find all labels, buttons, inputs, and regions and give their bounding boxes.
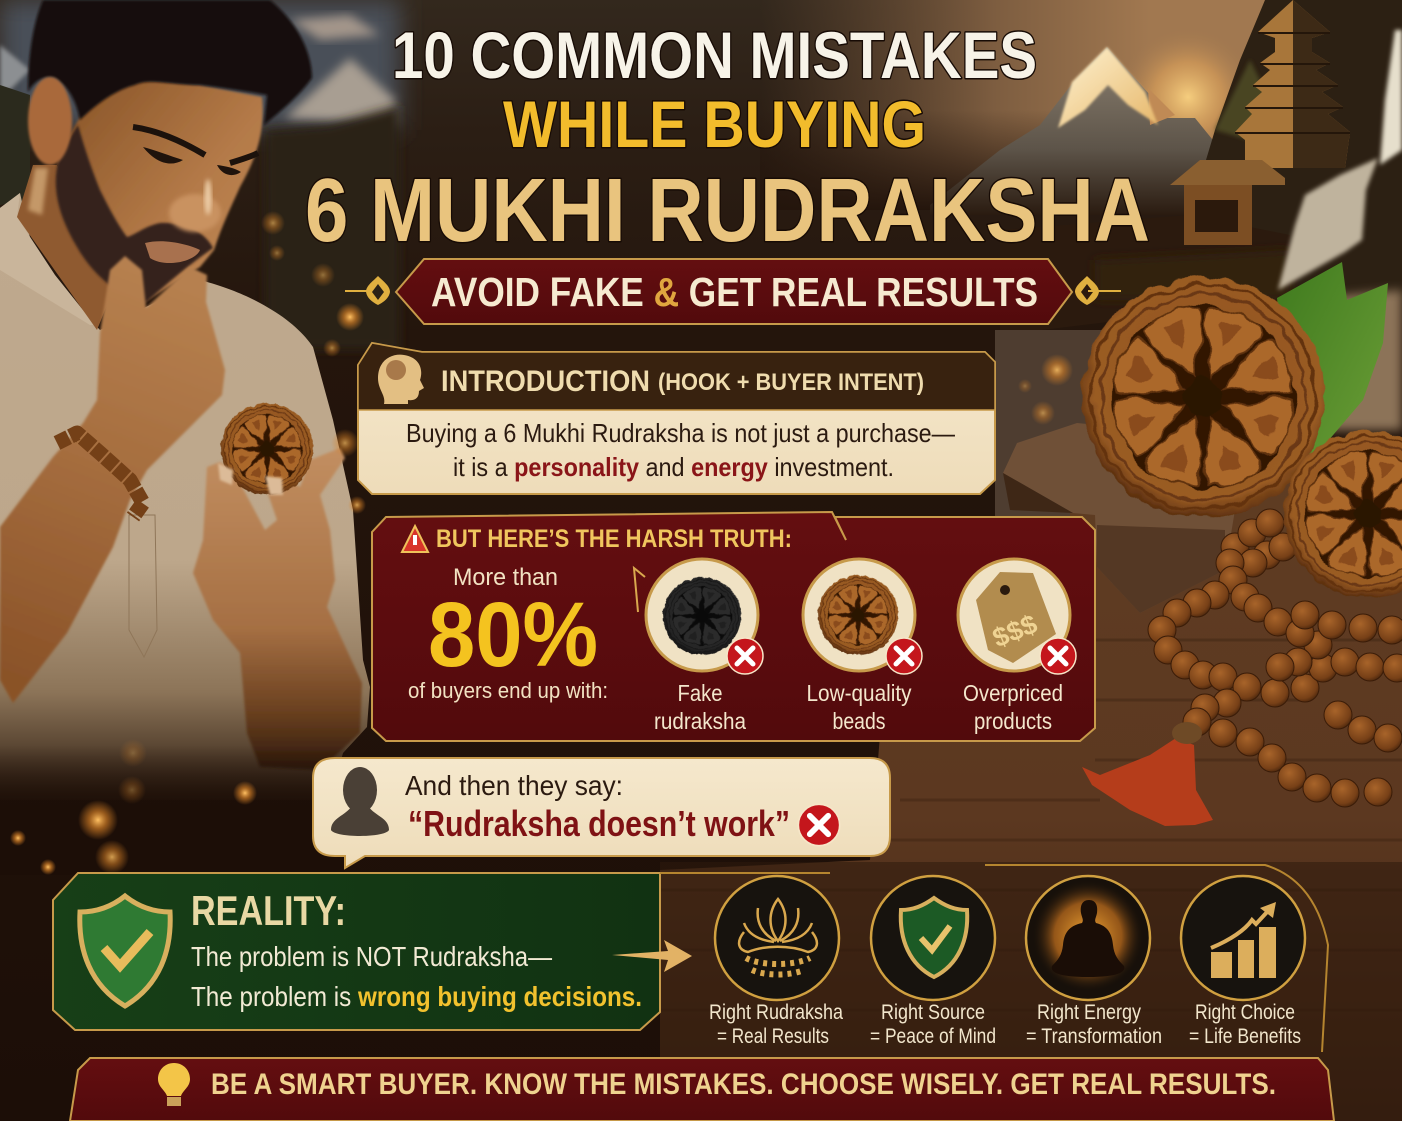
icon: head with brain xyxy=(378,355,424,404)
bracelet xyxy=(57,433,143,517)
reality heading: REALITY: xyxy=(191,887,346,934)
glowing sparks xyxy=(10,211,1073,875)
benefit: right energy: Right Energy xyxy=(1037,1001,1141,1024)
panel: reality: The problem is wrong buying decisions. xyxy=(191,981,642,1012)
eyes xyxy=(143,147,241,175)
scene: mountain xyxy=(930,47,1225,215)
nose xyxy=(169,194,221,232)
statistic: of buyers end up with: xyxy=(408,678,608,703)
title: WHILE BUYING xyxy=(503,87,926,161)
right arm and hand xyxy=(193,448,362,770)
eyebrows xyxy=(133,127,258,163)
item: overpriced products: Overpriced xyxy=(963,680,1063,706)
neck xyxy=(17,165,113,330)
item: fake rudraksha: rudraksha xyxy=(654,708,746,734)
panel: introduction xyxy=(358,343,995,494)
benefit: right choice xyxy=(1181,876,1305,1048)
kurta xyxy=(0,193,370,800)
statistic xyxy=(408,564,608,703)
benefit: right rudraksha xyxy=(709,876,843,1048)
icon: left ornament xyxy=(366,276,390,305)
arm with thinking hand xyxy=(0,256,225,703)
benefit: right source: = Peace of Mind xyxy=(870,1025,996,1048)
item: low-quality beads xyxy=(803,559,922,734)
arrow xyxy=(612,940,692,972)
fingertips xyxy=(218,463,283,495)
scene: pagoda temple xyxy=(1170,0,1350,245)
item: low-quality beads: beads xyxy=(832,708,886,734)
heading: INTRODUCTION xyxy=(441,365,650,398)
statistic: More than xyxy=(453,564,558,591)
benefit: right source xyxy=(870,876,996,1048)
placket xyxy=(129,515,157,657)
tassel xyxy=(1082,722,1213,826)
scene: cliff and forest xyxy=(1000,0,1402,335)
benefits row xyxy=(660,865,1328,1052)
heading: BUT HERE’S THE HARSH TRUTH: xyxy=(436,525,792,553)
benefit: right source: Right Source xyxy=(881,1001,985,1024)
icon: warning xyxy=(402,526,428,552)
icon: person silhouette xyxy=(331,767,389,836)
panel: harsh truth xyxy=(372,512,1095,741)
panel: introduction: it is a personality and energy investment. xyxy=(453,452,894,482)
title xyxy=(305,18,1150,261)
bottom banner xyxy=(70,1058,1334,1121)
hair xyxy=(28,0,312,125)
neck highlight xyxy=(28,168,48,215)
scene: green leaf xyxy=(1277,262,1388,482)
rudraksha mala beads xyxy=(1148,509,1402,807)
panel: introduction: (HOOK + BUYER INTENT) xyxy=(658,369,924,396)
title: 6 MUKHI RUDRAKSHA xyxy=(305,161,1150,261)
item: overpriced products: $$$ xyxy=(988,609,1041,653)
beard xyxy=(56,125,213,305)
item: low-quality beads: Low-quality xyxy=(806,680,912,706)
icon: red cross xyxy=(798,804,840,846)
banner: avoid fake: AVOID FAKE & GET REAL RESULTS xyxy=(431,269,1038,315)
intro text: Buying a 6 Mukhi Rudraksha is not just a purchase— xyxy=(406,418,955,448)
item: overpriced products: products xyxy=(974,708,1052,734)
benefit: right rudraksha: = Real Results xyxy=(717,1025,829,1048)
icon: shield check xyxy=(80,896,170,1006)
item: fake rudraksha: Fake xyxy=(678,680,722,706)
lower fade xyxy=(0,745,400,815)
speech bubble: “Rudraksha doesn’t work” xyxy=(408,803,790,844)
benefit: right energy xyxy=(1026,876,1162,1048)
scene: wooden table xyxy=(660,440,1402,1121)
speech bubble xyxy=(313,758,890,868)
panel: reality xyxy=(53,873,660,1030)
face xyxy=(57,80,263,303)
benefit: right rudraksha: Right Rudraksha xyxy=(709,1001,843,1024)
held rudraksha xyxy=(207,389,327,509)
big rudraksha beads xyxy=(1045,239,1402,624)
item: overpriced products xyxy=(958,559,1076,734)
nose highlight xyxy=(204,179,212,215)
benefit: right energy: = Transformation xyxy=(1026,1025,1162,1048)
benefit: right choice: Right Choice xyxy=(1195,1001,1295,1024)
item: fake rudraksha xyxy=(646,559,763,734)
call to action: BE A SMART BUYER. KNOW THE MISTAKES. CHOOSE WISELY. GET REAL RESULTS. xyxy=(211,1068,1276,1101)
scene: waterfall xyxy=(1278,30,1402,290)
statistic: 80% xyxy=(428,584,598,686)
scene: haze and lake xyxy=(995,290,1402,520)
man figure xyxy=(0,0,400,875)
collar xyxy=(0,193,95,325)
title: 10 COMMON MISTAKES xyxy=(392,18,1037,92)
left sky and mountains xyxy=(0,0,400,130)
banner: avoid fake xyxy=(345,259,1121,324)
icon: right ornament xyxy=(1075,276,1099,305)
reality text: The problem is NOT Rudraksha— xyxy=(191,941,552,972)
scene: rock slab xyxy=(1003,423,1240,613)
quote text: And then they say: xyxy=(405,770,623,801)
benefit: right choice: = Life Benefits xyxy=(1189,1025,1301,1048)
lips xyxy=(145,241,200,263)
ear xyxy=(28,77,72,165)
icon: light bulb xyxy=(158,1063,190,1106)
